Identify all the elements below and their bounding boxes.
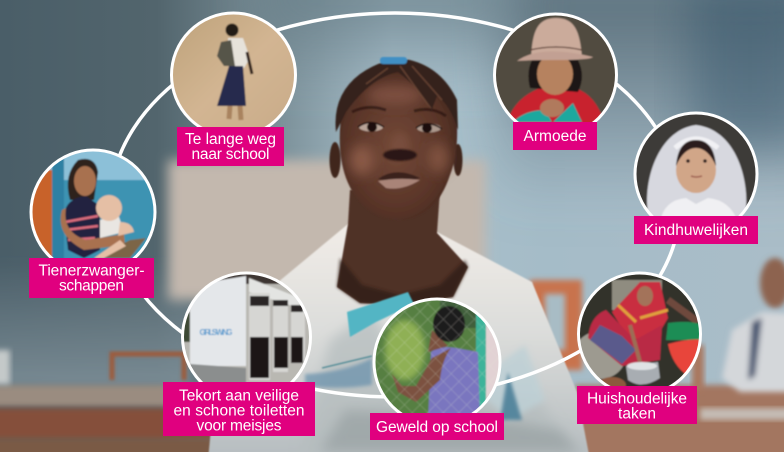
label: lack of safe toilets: voor meisjes xyxy=(196,418,282,434)
photo: child bride xyxy=(634,112,758,216)
photo: teen mother with baby xyxy=(30,148,156,258)
eyes xyxy=(352,107,446,133)
painted wall sign: GIRLS WING xyxy=(200,328,232,337)
photo: woman doing household chores xyxy=(577,272,702,386)
photo: school toilets xyxy=(181,272,312,382)
label: teen pregnancies: Tienerzwanger- xyxy=(38,262,144,280)
label: child marriage: Kindhuwelijken xyxy=(644,222,748,239)
connecting ring xyxy=(110,13,680,397)
nose xyxy=(383,133,417,161)
label: teen pregnancies: schappen xyxy=(59,278,124,294)
label: teen pregnancies xyxy=(29,258,154,298)
label: long way to school: Te lange weg xyxy=(185,131,276,148)
hair clip xyxy=(380,57,407,64)
label: household chores xyxy=(577,386,697,424)
cheek and forehead highlights xyxy=(350,85,448,175)
background person on right xyxy=(722,258,784,392)
label: violence at school: Geweld op school xyxy=(376,419,498,436)
label: poverty xyxy=(513,122,597,150)
neck and chest xyxy=(337,190,468,305)
label: lack of safe toilets: en schone toiletten xyxy=(174,402,304,420)
label: household chores: Huishoudelijke xyxy=(587,390,687,408)
mouth xyxy=(378,172,420,189)
hair xyxy=(336,59,458,132)
photo: girl with hat xyxy=(493,12,618,122)
ears xyxy=(330,142,462,178)
photo: girl walking xyxy=(170,12,297,127)
label: child marriage xyxy=(634,216,758,244)
central photo: girl in school uniform xyxy=(208,57,590,452)
label: long way to school: naar school xyxy=(192,146,270,163)
label: lack of safe toilets: Tekort aan veilige xyxy=(179,388,299,404)
turquoise collar xyxy=(347,292,414,337)
face xyxy=(340,68,457,220)
label: poverty: Armoede xyxy=(524,128,586,145)
label: lack of safe toilets xyxy=(163,382,315,436)
photo: girl at fence xyxy=(372,298,502,413)
label: household chores: taken xyxy=(618,406,656,422)
shirt xyxy=(208,224,590,452)
label: violence at school xyxy=(370,413,504,440)
label: long way to school xyxy=(177,127,284,166)
